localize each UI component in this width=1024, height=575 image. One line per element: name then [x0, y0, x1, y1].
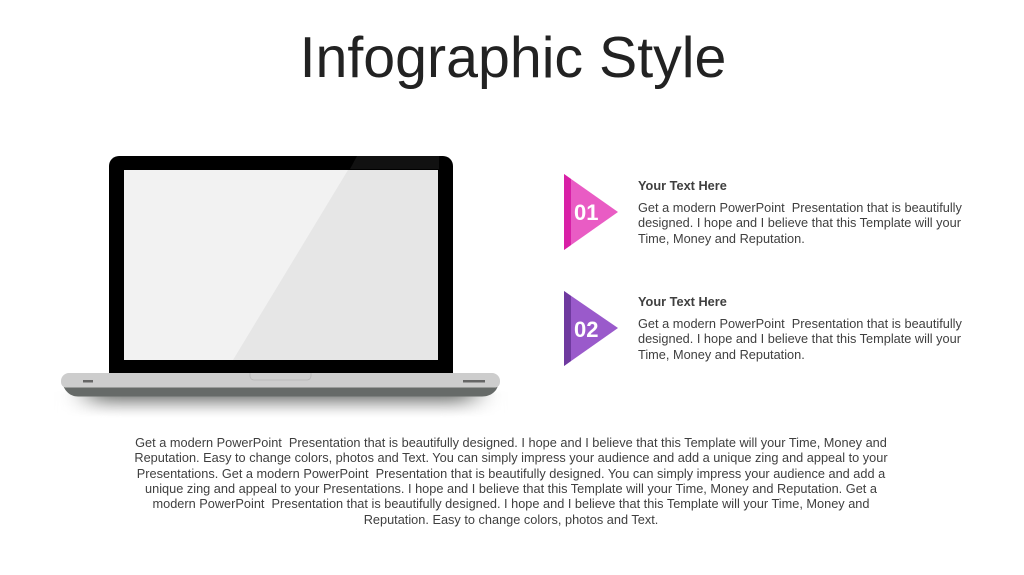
screen glare [124, 170, 348, 360]
laptop base lower [63, 385, 498, 396]
number 02: 02 [574, 317, 598, 342]
number 01: 01 [574, 200, 598, 225]
left port [83, 380, 93, 382]
body 01: Get a modern PowerPoint Presentation that is beautifully designed. I hope and I believe that this Template will your Time, Money and Reputation. [638, 200, 962, 246]
frame glare [350, 156, 439, 169]
body 02: Get a modern PowerPoint Presentation that is beautifully designed. I hope and I believe that this Template will your Time, Money and Reputation. [638, 316, 962, 362]
text block 01 [638, 178, 962, 246]
laptop screen [124, 170, 438, 360]
laptop shadow [88, 392, 474, 417]
text block 02 [638, 294, 962, 362]
badge 01 [564, 174, 618, 250]
heading 01: Your Text Here [638, 178, 727, 193]
triangle 01 [564, 174, 618, 250]
icon: laptop illustration [61, 156, 500, 414]
right port [463, 380, 485, 382]
laptop base upper [61, 373, 500, 388]
badge 02 [564, 291, 618, 366]
title: Infographic Style [300, 26, 726, 90]
triangle 02 [564, 291, 618, 366]
laptop screen frame [109, 156, 453, 374]
heading 02: Your Text Here [638, 294, 727, 309]
triangle 01 dark strip [564, 174, 571, 250]
bottom paragraph: Get a modern PowerPoint Presentation that is beautifully designed. I hope and I believe that this Template will your Time, Money and Reputation. Easy to change colors, photos and Text. You can simply impress your audience and add a unique zing and appeal to your Presentations. Get a modern PowerPoint Presentation that is beautifully designed. You can simply impress your audience and add a unique zing and appeal to your Presentations. I hope and I believe that this Template will your Time, Money and Reputation. Get a modern PowerPoint Presentation that is beautifully designed. I hope and I believe that this Template will your Time, Money and Reputation. Easy to change colors, photos and Text. [134, 435, 888, 527]
trackpad notch [250, 373, 311, 380]
triangle 02 dark strip [564, 291, 571, 366]
